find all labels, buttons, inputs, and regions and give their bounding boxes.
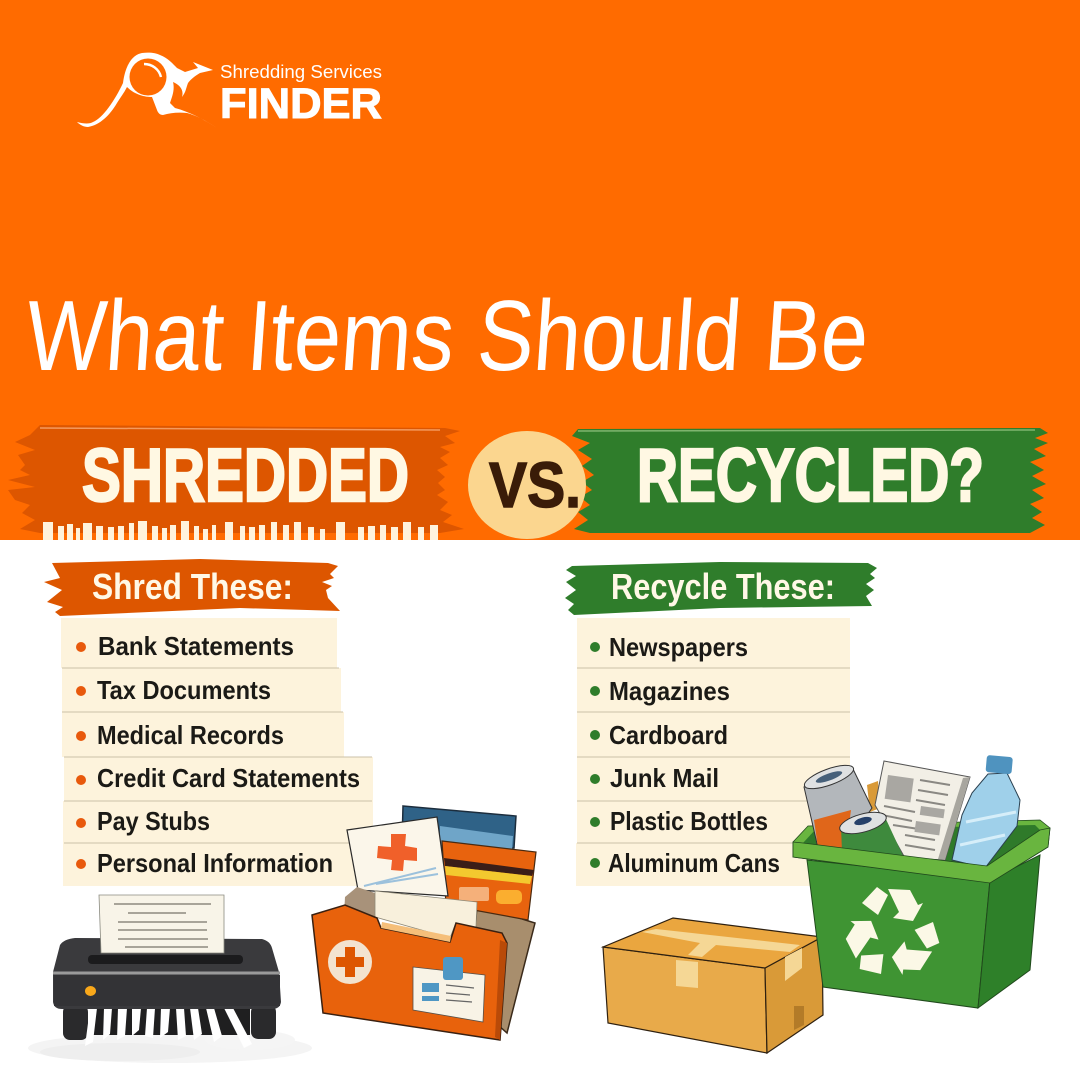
recycle list items: Cardboard <box>609 720 728 750</box>
paper being shredded <box>99 895 224 953</box>
recycle list rows <box>576 618 850 886</box>
shredder slot <box>88 955 243 964</box>
icon: cardboard box <box>603 918 823 1053</box>
orange header background <box>0 0 1080 540</box>
heading ribbon: Shred These <box>44 559 340 616</box>
recycle list items: Magazines <box>609 676 730 706</box>
VS badge <box>468 431 586 539</box>
bin back rim <box>793 820 1050 883</box>
blue wallet card <box>402 806 516 850</box>
recycle symbol <box>837 887 947 983</box>
bin body <box>807 860 990 1008</box>
power light <box>85 986 96 996</box>
shredder body <box>53 938 281 1009</box>
orange credit card <box>442 841 536 920</box>
logo text: FINDER <box>220 80 382 128</box>
recycle list items <box>590 632 780 878</box>
icon: recycling bin <box>793 755 1050 1008</box>
heading ribbon: Recycle These: Recycle These: <box>611 566 835 607</box>
shredded paper strips <box>43 521 438 540</box>
banner: recycled <box>572 428 1048 533</box>
icon: kangaroo with magnifying glass <box>77 53 217 128</box>
cream paper <box>375 891 477 938</box>
medical cross badge <box>328 940 372 984</box>
folder front <box>312 905 507 1040</box>
logo text: Shredding Services <box>220 62 382 82</box>
banner: shredded <box>8 425 464 540</box>
title: What Items Should Be <box>22 280 872 392</box>
heading ribbon: Shred These: Shred These: <box>92 566 293 607</box>
shredder feet <box>63 1005 88 1040</box>
list items: Medical Records <box>97 720 284 750</box>
bin front rim <box>793 828 1050 883</box>
recycle list items: Newspapers <box>609 632 748 662</box>
green can <box>837 808 904 858</box>
list items: Bank Statements <box>98 631 294 661</box>
list items: Pay Stubs <box>97 806 210 836</box>
list items: Tax Documents <box>97 675 271 705</box>
panel: shred list <box>44 559 373 886</box>
heading ribbon: Recycle These <box>565 562 877 615</box>
shredded paper pile <box>28 1030 312 1063</box>
recycle list items: Aluminum Cans <box>608 848 780 878</box>
bin interior <box>803 825 1040 866</box>
recycle list items: Junk Mail <box>610 763 719 793</box>
list items: Personal Information <box>97 848 333 878</box>
list items: Credit Card Statements <box>97 763 360 793</box>
plastic bottle <box>952 755 1020 868</box>
text: VS.: VS. <box>489 449 581 521</box>
ID card <box>413 957 485 1022</box>
shredded strips <box>85 1007 252 1048</box>
panel: recycle list <box>565 562 877 886</box>
newspaper <box>875 761 970 860</box>
text: SHREDDED: SHREDDED <box>82 433 409 517</box>
icon: paper shredder <box>28 895 312 1063</box>
packing tape <box>642 929 802 988</box>
list items <box>76 631 360 878</box>
icon: medical folder with cards <box>312 806 536 1040</box>
medical document <box>347 817 448 896</box>
folder back <box>470 905 535 1033</box>
logo: Shredding Services Finder <box>77 53 382 128</box>
tan clip <box>344 887 376 918</box>
recycle list items: Plastic Bottles <box>610 806 768 836</box>
tan card behind <box>867 781 880 812</box>
bin items <box>802 755 1020 868</box>
list rows <box>61 618 373 886</box>
aluminum can <box>802 761 872 850</box>
